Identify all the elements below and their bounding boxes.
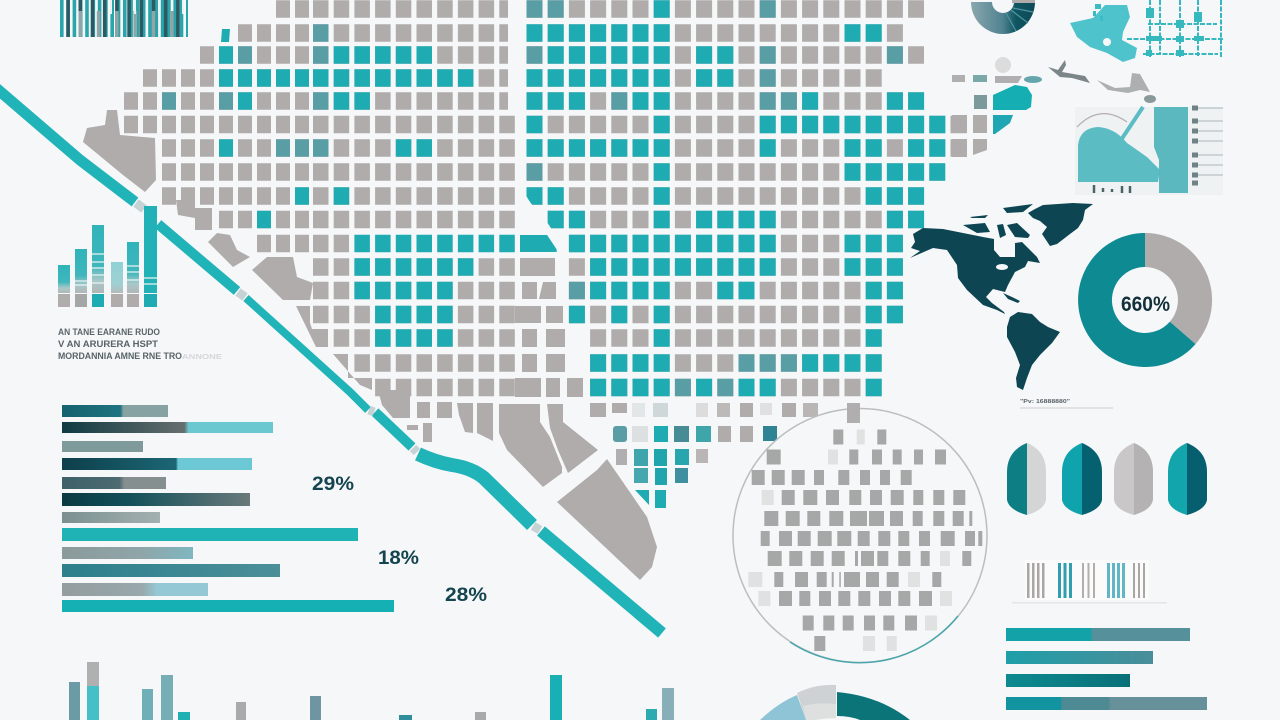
panel frame bbox=[1075, 107, 1223, 195]
fading south edge blocks bbox=[590, 403, 818, 508]
muted teal blocks bbox=[162, 9, 903, 388]
street network bbox=[1127, 0, 1223, 58]
shield 4 bbox=[1168, 443, 1207, 515]
teal arc on circle bbox=[790, 616, 958, 663]
central road bbox=[520, 0, 564, 305]
percent label: first: 29% bbox=[312, 474, 354, 495]
bottom column chart bbox=[69, 662, 674, 720]
bright teal blocks bbox=[219, 9, 945, 388]
top right teal city map bbox=[1070, 0, 1223, 62]
North America bbox=[910, 228, 1040, 314]
grey blocks: west grid bbox=[124, 9, 309, 244]
percent label: third: 28% bbox=[445, 585, 487, 606]
inset curve bbox=[1077, 114, 1127, 127]
river bbox=[0, 88, 662, 633]
lake island bbox=[1103, 38, 1111, 46]
inset channel bbox=[1113, 107, 1143, 152]
small islets bbox=[1093, 4, 1103, 21]
inset footer marks bbox=[1094, 185, 1130, 193]
bar chart: left with striped columns bbox=[58, 206, 157, 307]
mini striped table chart bbox=[1012, 560, 1167, 604]
inset water bbox=[1078, 127, 1160, 182]
arctic islands bbox=[963, 204, 1033, 238]
circle of scattered blocks bbox=[733, 403, 987, 663]
left caption text bbox=[58, 327, 222, 362]
left caption text: AN TANE EARANE RUDO bbox=[58, 327, 160, 338]
percent label: second: 18% bbox=[378, 548, 419, 569]
inset column bbox=[1154, 107, 1188, 193]
inset legend bbox=[1192, 108, 1198, 183]
South America bbox=[1007, 312, 1060, 390]
donut value: 660% bbox=[1121, 293, 1170, 316]
left caption text: ANNONE bbox=[182, 354, 222, 361]
grey blocks: east grid bbox=[526, 9, 966, 388]
shield icons bbox=[1007, 443, 1207, 515]
inset map panel bbox=[1075, 107, 1223, 195]
left caption text: MORDANNIA AMNE RNE TRO bbox=[58, 351, 182, 362]
street junctions bbox=[1146, 8, 1204, 56]
teal lake shape bbox=[1070, 5, 1137, 62]
map caption: "Pv: 16888880" bbox=[1020, 399, 1070, 405]
grey blocks: middle grid bbox=[313, 9, 515, 388]
bottom donut chart bbox=[760, 685, 910, 720]
teal share bbox=[1078, 233, 1196, 367]
shield 2 bbox=[1062, 443, 1102, 515]
shield 3 bbox=[1114, 443, 1153, 515]
archipelago blocks bbox=[952, 57, 1156, 157]
Greenland bbox=[1028, 203, 1093, 246]
map caption bbox=[1020, 399, 1113, 409]
grey blocks bbox=[752, 437, 982, 644]
top crossing block bbox=[847, 403, 860, 423]
circle outline bbox=[733, 408, 987, 662]
south land shapes bbox=[378, 390, 657, 580]
Great Lakes bbox=[996, 264, 1008, 270]
world map: Americas bbox=[910, 203, 1093, 390]
river crossings bbox=[136, 203, 540, 530]
grey share bbox=[1145, 233, 1212, 344]
top pie chart bbox=[971, 0, 1035, 34]
pale blocks bbox=[748, 437, 952, 644]
left caption text: V AN ARURERA HSPT bbox=[58, 339, 158, 350]
barcode chart: top left bbox=[60, 7, 188, 24]
Caribbean bbox=[1003, 293, 1020, 303]
city map: square block grid bbox=[83, 0, 966, 580]
horizontal bars: right bbox=[1006, 628, 1207, 710]
donut chart: right bbox=[1078, 233, 1212, 367]
shield 1 bbox=[1007, 443, 1046, 515]
central blocks beside the road bbox=[515, 282, 583, 397]
wide blocks by the central road bbox=[221, 29, 558, 276]
horizontal bar chart: left bbox=[62, 405, 487, 612]
west coast land shapes bbox=[83, 110, 372, 390]
